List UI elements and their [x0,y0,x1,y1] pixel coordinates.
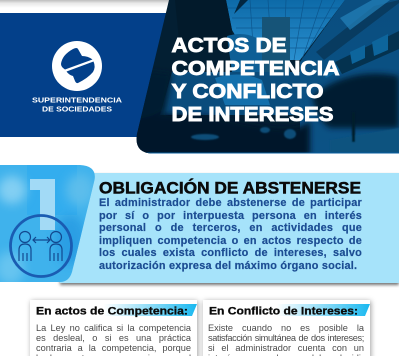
plants [130,70,399,156]
obligation text [99,197,362,272]
panel: obligation band [60,173,399,283]
circle [10,216,72,276]
text: conflicto: si el administrador cuenta con un [208,343,364,353]
text: conflicto [208,323,364,356]
panel: competencia [30,300,197,356]
obligation text: impliquen competencia o en actos respecto de [99,235,362,247]
panel: conflicto [203,300,370,356]
columns [262,17,290,72]
title: COMPETENCIA [172,57,340,80]
icon: watercolor numbered badge [0,165,95,282]
title [172,34,340,126]
title: ACTOS DE [172,34,286,57]
obligation text: personal o de terceros, en actividades que [99,222,362,234]
text: competencia [36,323,191,356]
panel: blue logo banner [0,13,175,137]
obligation text: El administrador debe abstenerse de participar [99,197,362,209]
logo wordmark: SUPERINTENDENCIA [32,96,122,104]
heading: obligation: OBLIGACIÓN DE ABSTENERSE [99,178,361,198]
icon: logo [52,41,102,91]
text: competencia: La Ley no califica si la competencia [36,323,191,333]
logo wordmark: DE SOCIEDADES [42,104,112,114]
obligation text: autorización expresa del máximo órgano social. [99,260,357,272]
text: conflicto: satisfacción simultánea de dos intereses; [208,333,364,343]
obligation text: por sí o por interpuesta persona en interés [99,210,362,222]
text: competencia: contraria a la competencia, porque [36,343,191,353]
text: competencia: es desleal, o si es una práctica [36,333,191,343]
logo wordmark [32,96,122,114]
heading strip: competencia: En actos de Competencia: [36,306,188,318]
people and arrow [19,232,62,261]
text: conflicto: Existe cuando no es posible la [208,323,364,333]
top grey shadow strip [0,0,170,8]
obligation text: los cuales exista conflicto de intereses, salvo [99,247,362,259]
heading strip: conflicto: En Conflicto de Intereses: [209,306,358,318]
skylight [226,0,345,60]
right building [300,0,399,153]
photo header with title [136,0,399,154]
big numeral 1 [30,179,55,230]
title: Y CONFLICTO [172,80,324,103]
title: DE INTERESES [172,103,334,126]
